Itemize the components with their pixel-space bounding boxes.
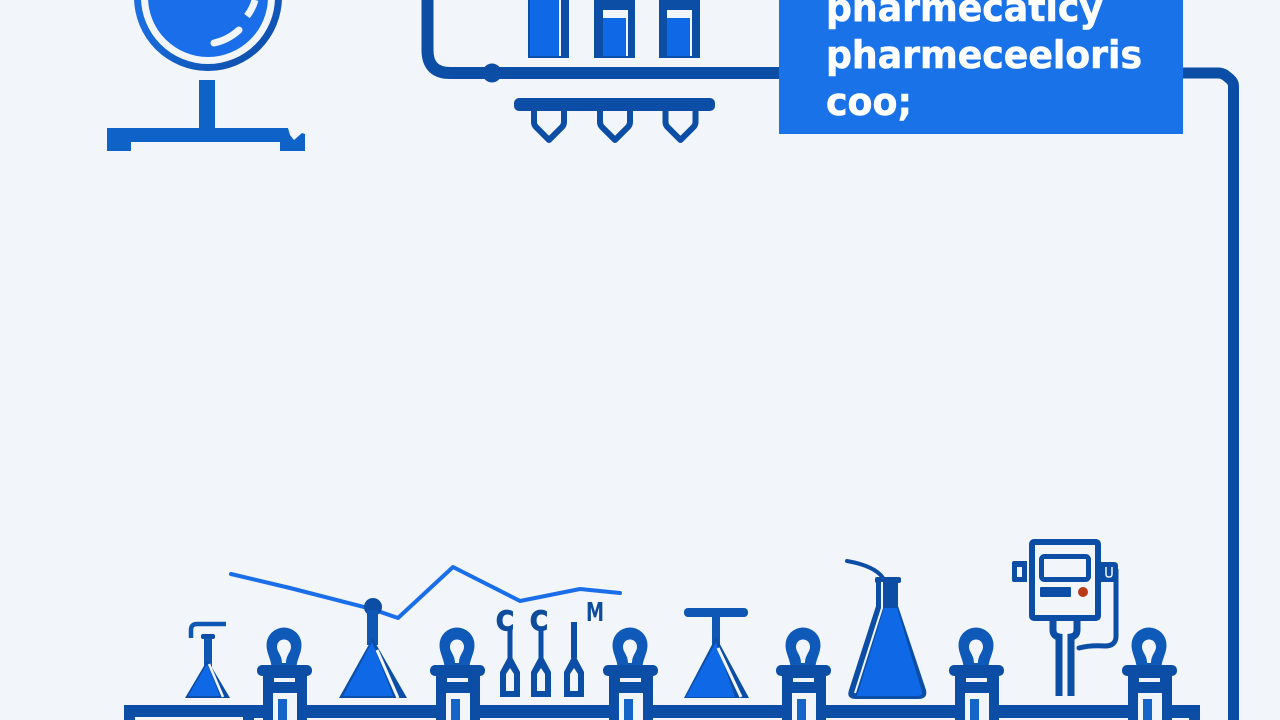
icon: magnifying glass on stand [107,0,305,151]
tube 2 [594,0,635,58]
tube 3 [659,0,700,58]
bench post 6 [1122,628,1177,720]
bench post 5 [949,628,1004,720]
device button bar [1040,587,1071,597]
bench post 1 [257,628,312,720]
callout text line 3: coo; [826,80,912,124]
magnifier stand [107,80,305,151]
icon: test tubes [528,0,700,58]
tool 2 [531,628,551,697]
icon: large flask with ball [339,598,407,698]
tool label M: M [586,598,604,628]
magnifier lens [134,0,282,71]
tool label C: C [496,606,514,637]
icon: surgical tools with labels [496,598,604,697]
right clip and cable [1079,562,1118,648]
callout: title box [779,0,1183,134]
bench [124,705,1200,720]
pipe: right connector [1183,73,1234,720]
icon: rack with three tips [514,98,715,140]
tube 1 [528,0,569,58]
probe [1053,620,1077,696]
device screen [1042,556,1088,580]
tool 3 [564,622,584,697]
icon: Erlenmeyer flask [847,561,926,699]
callout text line 2: pharmeceeloris [826,33,1142,77]
icon: meter device with probe [1012,542,1118,696]
device body [1032,542,1098,618]
tool label C: C [530,606,548,637]
pipe: upper left connector [428,0,780,82]
line chart [231,567,620,618]
left clip [1012,561,1027,582]
icon: T-top flask [684,608,749,698]
icon: small flask [185,624,230,698]
bench post 3 [603,628,658,720]
status light [1078,587,1088,597]
tool 1 [500,628,520,697]
bench post 4 [776,628,831,720]
bench post 2 [430,628,485,720]
